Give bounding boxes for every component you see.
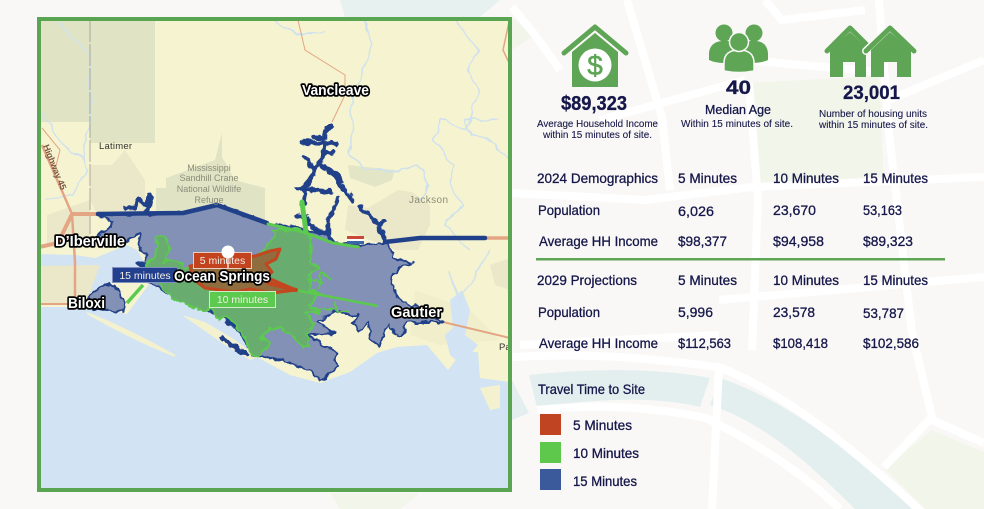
city labels: Ocean Springs (174, 268, 270, 285)
city labels: Gautier (391, 304, 442, 321)
legend: travel time to site: 15 Minutes (573, 473, 637, 489)
divider rule (536, 258, 945, 260)
legend: travel time to site: 10 Minutes (573, 445, 639, 461)
table: 2029 projections: 2029 Projections (537, 272, 637, 288)
drive-time 5 minutes area (190, 249, 296, 293)
base map labels: Mississippi (187, 163, 231, 173)
table: 2029 projections (537, 272, 928, 351)
legend: travel time to site: Travel Time to Site (538, 381, 645, 397)
stat: average household income: Average Household Income (537, 119, 658, 130)
base map labels: Sandhill Crane (179, 173, 239, 183)
table: 2029 projections: 15 Minutes (863, 272, 928, 288)
table: 2029 projections: 5,996 (678, 304, 713, 320)
icon: house with dollar sign: $ (587, 50, 603, 81)
rivers (39, 20, 510, 300)
base map labels: National Wildlife (177, 184, 241, 194)
base map labels: Latimer (99, 141, 132, 152)
base map labels: Jackson (409, 195, 448, 206)
table: 2024 demographics: 15 Minutes (863, 170, 928, 186)
stat: housing units (818, 28, 928, 131)
table: 2024 demographics: $89,323 (863, 233, 913, 249)
table: 2029 projections: Average HH Income (539, 335, 658, 351)
stat: average household income: within 15 minutes of site. (542, 130, 652, 141)
drive-time labels (112, 252, 276, 308)
base map labels: Pa (499, 342, 511, 353)
legend: travel time to site (538, 381, 645, 490)
forest and urban shading (41, 21, 508, 303)
county line (90, 21, 91, 238)
barrier islands (87, 313, 500, 410)
table: 2029 projections: 10 Minutes (773, 272, 839, 288)
table: 2024 demographics: 23,670 (773, 202, 816, 218)
table: 2024 demographics (537, 170, 928, 249)
table: 2024 demographics: 6,026 (678, 203, 714, 219)
table: 2029 projections: 5 Minutes (678, 272, 737, 288)
table: 2029 projections: $102,586 (863, 335, 919, 351)
icon: people group (709, 24, 768, 72)
highways (39, 20, 510, 338)
table: 2029 projections: $108,418 (773, 335, 828, 351)
table: 2024 demographics: Average HH Income (539, 233, 658, 249)
stat: median age: Within 15 minutes of site. (681, 119, 793, 130)
stat: average household income (537, 27, 658, 141)
base map labels: Refuge (194, 195, 224, 205)
base map labels (41, 141, 511, 353)
stat: median age (681, 24, 793, 130)
panel: travel-time map (39, 19, 511, 490)
table: 2024 demographics: $98,377 (678, 233, 727, 249)
drive-time labels: 5 minutes (200, 255, 245, 267)
city labels: D’Iberville (55, 233, 125, 250)
highway shield (347, 236, 364, 244)
table: 2029 projections: $112,563 (678, 335, 731, 351)
site pin (222, 246, 234, 268)
table: 2029 projections: 53,787 (863, 305, 904, 321)
icon: two houses (827, 28, 914, 77)
base map labels: Highway 45 (41, 143, 68, 191)
drive-time 15 minutes area (87, 125, 485, 382)
water (39, 283, 510, 490)
stat: median age: Median Age (705, 102, 771, 117)
legend: travel time to site: 5 Minutes (573, 417, 632, 433)
stat: housing units: within 15 minutes of site. (818, 120, 928, 131)
stat: median age: 40 (726, 78, 751, 99)
city labels (55, 82, 442, 321)
drive-time 10 minutes area (127, 202, 378, 357)
table: 2024 demographics: 2024 Demographics (537, 170, 658, 186)
table: 2024 demographics: 5 Minutes (678, 170, 737, 186)
table: 2024 demographics: $94,958 (773, 233, 824, 249)
city labels: Vancleave (302, 82, 369, 99)
drive-time labels: 15 minutes (119, 270, 171, 282)
table: 2024 demographics: 53,163 (863, 202, 902, 218)
stat: housing units: Number of housing units (819, 109, 927, 120)
stat: average household income: $89,323 (561, 93, 627, 115)
table: 2024 demographics: 10 Minutes (773, 170, 839, 186)
table: 2024 demographics: Population (538, 202, 600, 218)
table: 2029 projections: Population (538, 304, 600, 320)
drive-time labels: 10 minutes (217, 294, 268, 306)
table: 2029 projections: 23,578 (773, 304, 815, 320)
stat: housing units: 23,001 (843, 83, 900, 104)
city labels: Biloxi (68, 295, 105, 312)
